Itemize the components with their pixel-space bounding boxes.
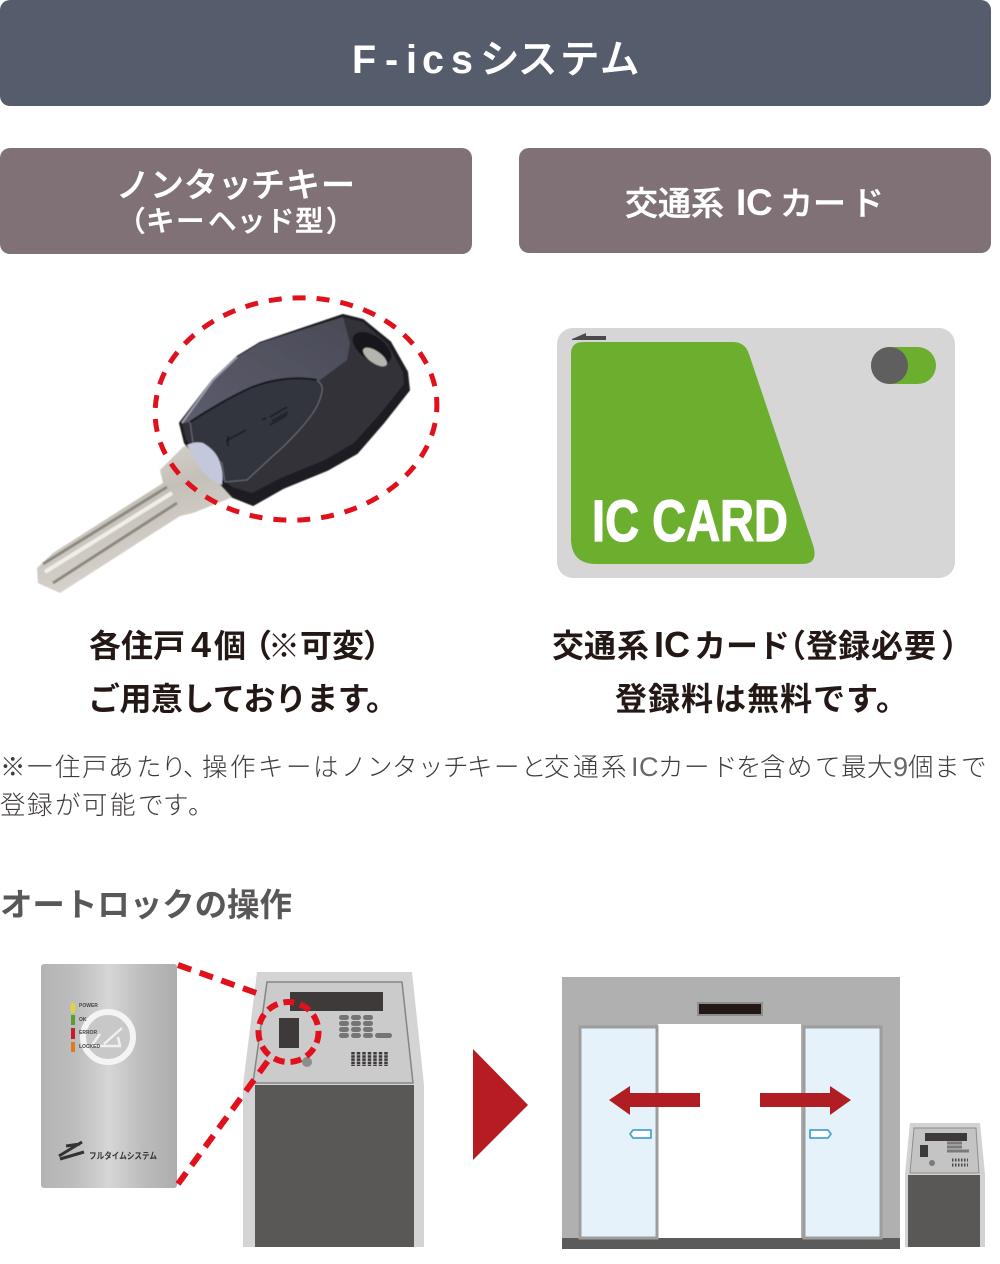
toggle mark xyxy=(871,347,936,384)
automatic door xyxy=(562,977,900,1249)
door opening xyxy=(658,1024,801,1238)
heading: one-touch key: （キーヘッド型） xyxy=(117,206,355,238)
note text: 9 xyxy=(893,752,908,782)
caption: key: 4 xyxy=(191,624,211,665)
title banner: システム xyxy=(480,38,640,82)
caption: card: 交通系 xyxy=(552,628,649,664)
heading: one-touch key: ノンタッチキー xyxy=(116,167,355,205)
left handle xyxy=(630,1130,651,1138)
card label: IC CARD xyxy=(592,489,788,554)
reader panel: POWER xyxy=(79,1003,98,1009)
caption: key xyxy=(88,624,398,717)
shield panel xyxy=(190,378,322,482)
dashed highlight ellipse xyxy=(148,288,444,530)
small terminal xyxy=(905,1123,985,1247)
reader panel: LOCKED xyxy=(79,1044,100,1050)
arrow: next step xyxy=(473,1049,528,1160)
right arrow xyxy=(760,1086,851,1115)
heading: transit IC card: IC xyxy=(736,182,773,223)
note text: 個まで xyxy=(908,754,987,782)
speaker grille xyxy=(353,1052,386,1066)
key head xyxy=(180,315,409,505)
caption: key: 個（※可変） xyxy=(214,628,395,664)
heading: one-touch key xyxy=(0,148,472,254)
title banner: F-ics xyxy=(352,38,473,82)
title banner xyxy=(0,0,991,106)
note text: IC xyxy=(631,752,658,782)
caption: key: 各住戸 xyxy=(89,628,185,664)
reader panel: OK xyxy=(79,1017,87,1023)
heading: transit IC card: 交通系 xyxy=(625,185,724,222)
reader panel: ERROR xyxy=(79,1030,97,1036)
reader panel xyxy=(41,964,177,1188)
caption: card: IC xyxy=(654,624,690,665)
IC card xyxy=(557,328,955,578)
heading: auto-lock operation: オートロックの操作 xyxy=(0,887,292,923)
green card area xyxy=(571,342,815,564)
right handle xyxy=(810,1130,831,1138)
caption: key: ご用意しております。 xyxy=(88,681,398,717)
dashed callout circle and lines xyxy=(178,965,318,1184)
caption: card xyxy=(552,624,973,717)
heading: transit IC card xyxy=(519,148,991,253)
key photo with dashed circle xyxy=(37,288,444,593)
right door xyxy=(804,1027,881,1238)
left door xyxy=(580,1027,657,1238)
entrance terminal xyxy=(178,965,424,1247)
silver cap xyxy=(187,442,223,485)
caption: card: 登録料は無料です。 xyxy=(615,681,908,717)
note text: カードを含めて最大 xyxy=(658,754,893,782)
note text: ※一住戸あたり、操作キーはノンタッチキーと交通系 xyxy=(0,754,627,782)
keypad xyxy=(339,1015,392,1038)
heading: transit IC card: カード xyxy=(780,185,884,222)
left arrow xyxy=(609,1086,700,1115)
note text: 登録が可能です。 xyxy=(0,792,214,820)
engraved logo xyxy=(226,407,288,446)
card arrow xyxy=(572,333,606,340)
reader panel: フルタイムシステム xyxy=(89,1150,157,1161)
caption: card: カード（登録必要） xyxy=(694,628,973,664)
key blade xyxy=(37,445,233,593)
note text xyxy=(0,752,987,820)
key ring hole xyxy=(347,326,397,370)
